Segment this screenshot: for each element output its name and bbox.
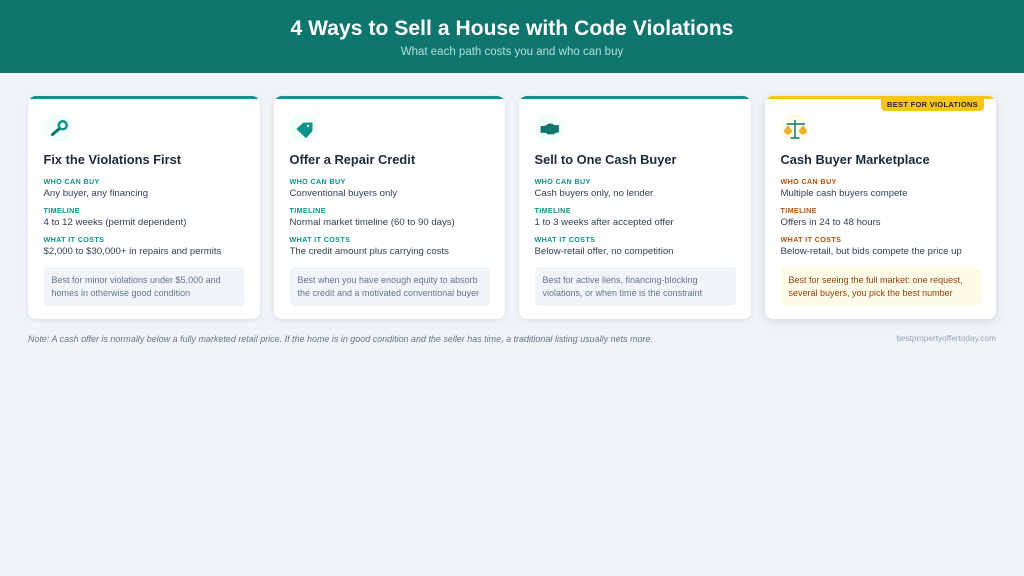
heading: Fix the Violations First (44, 152, 181, 166)
panel: sell to one cash buyer (519, 96, 751, 319)
label: what it costs: WHAT IT COSTS (44, 235, 104, 244)
title: 4 Ways to Sell a House with Code Violations (291, 17, 733, 40)
best-for note: Best when you have enough equity to absorb (298, 274, 478, 284)
icon: price tag (290, 114, 318, 142)
badge: best for violations: BEST FOR VIOLATIONS (887, 100, 978, 109)
best-for note: the credit and a motivated conventional buyer (298, 288, 479, 298)
heading: Sell to One Cash Buyer (534, 152, 677, 166)
best-for note (290, 267, 490, 306)
label: timeline: TIMELINE (290, 206, 326, 215)
label: who can buy: WHO CAN BUY (780, 177, 837, 186)
label: who can buy: WHO CAN BUY (534, 177, 591, 186)
heading: Cash Buyer Marketplace (780, 152, 930, 166)
header banner (0, 0, 1024, 73)
value: what it costs: $2,000 to $30,000+ in repairs and permits (44, 246, 221, 257)
label: what it costs: WHAT IT COSTS (290, 235, 350, 244)
value: who can buy: Any buyer, any financing (44, 188, 148, 199)
best-for note: several buyers, you pick the best number (788, 288, 953, 298)
best-for note: violations, or when time is the constraint (542, 288, 702, 298)
value: what it costs: The credit amount plus carrying costs (290, 246, 449, 257)
value: what it costs: Below-retail, but bids compete the price up (780, 246, 962, 257)
subtitle: What each path costs you and who can buy (401, 46, 623, 58)
best-for note: Best for minor violations under $5,000 and (52, 274, 221, 284)
value: timeline: 4 to 12 weeks (permit dependent) (44, 217, 186, 228)
badge: best for violations (881, 98, 984, 111)
value: timeline: 1 to 3 weeks after accepted offer (534, 217, 674, 228)
value: timeline: Offers in 24 to 48 hours (780, 217, 881, 228)
best-for note (534, 267, 736, 306)
label: timeline: TIMELINE (534, 206, 571, 215)
best-for note: Best for seeing the full market: one request, (788, 274, 963, 284)
label: what it costs: WHAT IT COSTS (534, 235, 595, 244)
best-for note (44, 267, 244, 306)
label: who can buy: WHO CAN BUY (44, 177, 100, 186)
value: who can buy: Cash buyers only, no lender (534, 188, 653, 199)
panel: offer a repair credit (274, 96, 505, 319)
value: who can buy: Multiple cash buyers compete (780, 188, 907, 199)
heading: Offer a Repair Credit (290, 152, 415, 166)
label: who can buy: WHO CAN BUY (290, 177, 346, 186)
icon: balance scale (781, 114, 809, 142)
icon: magnifier wrench (44, 114, 72, 142)
footnote: Note: A cash offer is normally below a fully marketed retail price. If the home is in good condition and the seller has time, a traditional listing usually nets more. (28, 334, 653, 344)
best-for note (780, 267, 980, 306)
label: what it costs: WHAT IT COSTS (780, 235, 841, 244)
label: timeline: TIMELINE (780, 206, 817, 215)
best-for note: Best for active liens, financing-blocking (542, 274, 698, 284)
panel: cash buyer marketplace (765, 96, 996, 319)
source site: bestpropertyoffertoday.com (896, 334, 996, 343)
panel: fix the violations first (28, 96, 260, 319)
value: who can buy: Conventional buyers only (290, 188, 397, 199)
value: what it costs: Below-retail offer, no competition (534, 246, 674, 257)
label: timeline: TIMELINE (44, 206, 80, 215)
icon: handshake (535, 114, 563, 142)
best-for note: homes in otherwise good condition (52, 288, 190, 298)
value: timeline: Normal market timeline (60 to 90 days) (290, 217, 455, 228)
